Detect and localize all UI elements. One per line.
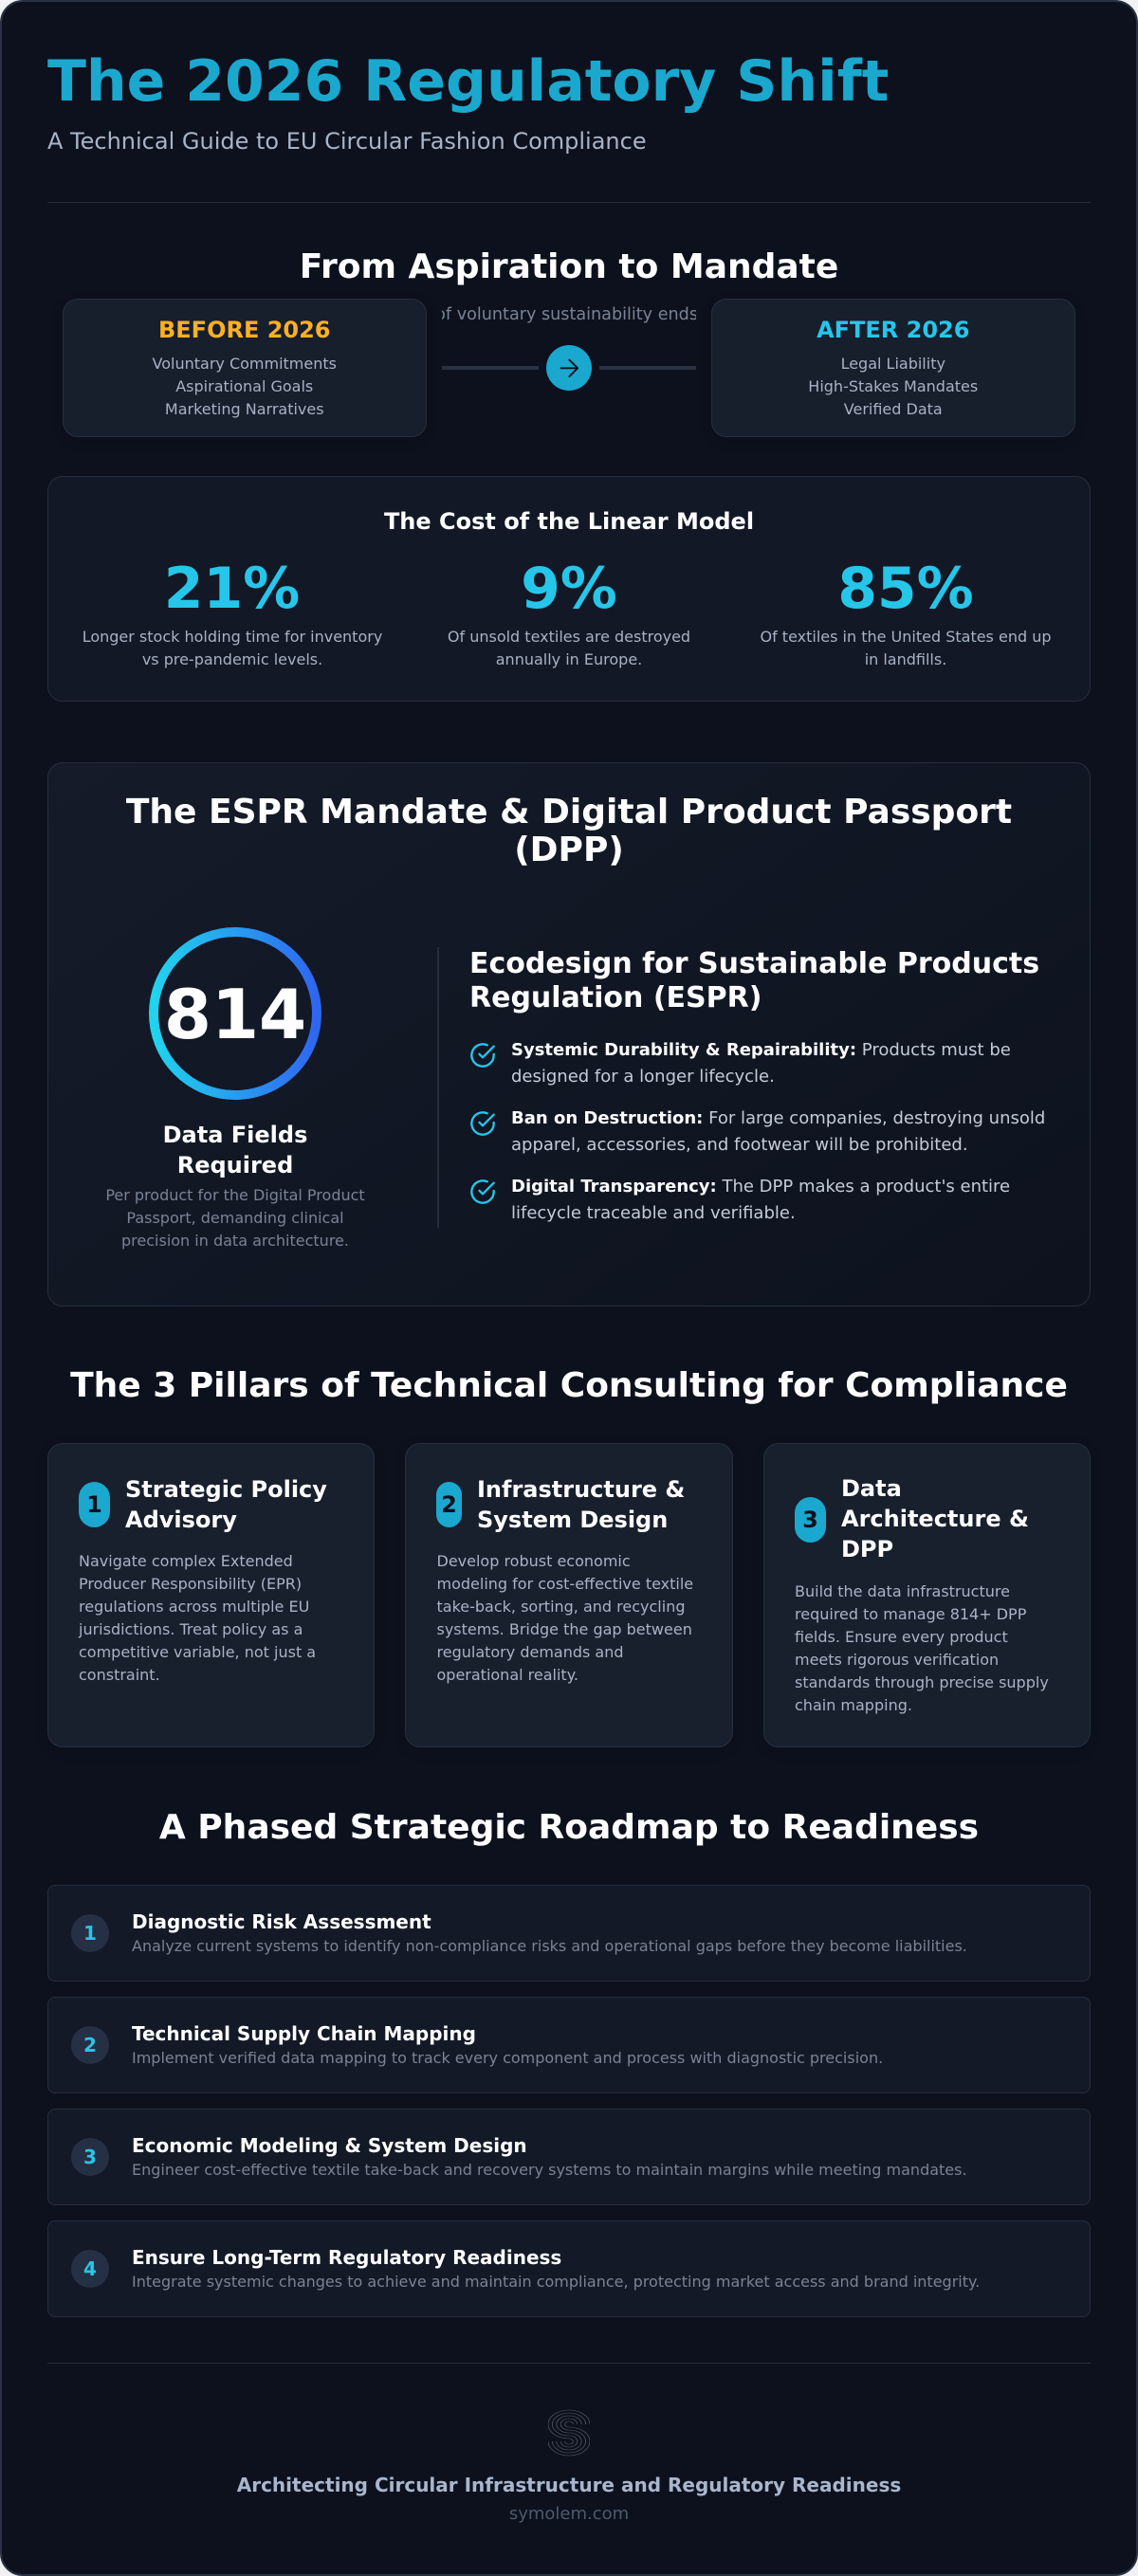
ring gauge: 814 [149, 927, 321, 1100]
pillar 1 heading: Advisory [125, 1507, 237, 1533]
heading: ecodesign regulation [469, 947, 1039, 1014]
bullet: digital transparency: lifecycle traceable and verifiable. [511, 1203, 796, 1223]
data fields note [105, 1185, 365, 1250]
arrow connector [442, 345, 696, 391]
pillar 3 heading: DPP [841, 1536, 893, 1562]
roadmap step 2 [47, 1997, 1091, 2093]
stat: 85%: Of textiles in the United States end up [760, 628, 1051, 645]
footer website: symolem.com [509, 2504, 629, 2524]
pillar 3 body: meets rigorous verification [795, 1650, 999, 1669]
roadmap step 4 [47, 2220, 1091, 2317]
big number 814: 814 [164, 975, 306, 1054]
stat: 85% [760, 556, 1051, 667]
bullet: durability: Systemic Durability & Repairability: Products must be [511, 1040, 1011, 1060]
pillar 1 body: competitive variable, not just a [79, 1642, 316, 1661]
pillar 2 body: regulatory demands and [436, 1642, 624, 1661]
panel: after 2026 [711, 299, 1075, 437]
pillar 2 heading [477, 1476, 685, 1533]
panel: cost of the linear model [47, 476, 1091, 702]
pillar 3 heading: Data [841, 1475, 902, 1502]
heading: ecodesign regulation: Ecodesign for Sustainable Products [469, 947, 1039, 980]
roadmap step 1 [47, 1885, 1091, 1982]
roadmap step 2: Implement verified data mapping to track every component and process with diagnostic precision. [132, 2048, 883, 2067]
pillar 3 heading [841, 1475, 1029, 1562]
roadmap step 3: Economic Modeling & System Design [132, 2134, 527, 2157]
heading: ESPR mandate and DPP [126, 793, 1012, 869]
pillar 3 body: fields. Ensure every product [795, 1627, 1008, 1646]
bullet: digital transparency [470, 1177, 1010, 1223]
pillar 2 badge [436, 1482, 462, 1527]
stat: 21% [83, 556, 382, 667]
pillar 1 body [78, 1551, 316, 1684]
clipped transition caption: voluntary sustainability ends [457, 305, 696, 324]
roadmap step 1: 1 [83, 1922, 97, 1945]
pillar 3 body: chain mapping. [795, 1695, 912, 1714]
pillar 3 body: Build the data infrastructure [795, 1581, 1010, 1600]
pillar 2 body: operational reality. [436, 1665, 578, 1684]
bullet: digital transparency: Digital Transparency: The DPP makes a product's entire [511, 1177, 1010, 1197]
stat: 21%: 21% [164, 556, 300, 622]
before list [152, 355, 337, 417]
after list: Legal Liability [841, 355, 945, 372]
pillar 2 body: systems. Bridge the gap between [436, 1619, 692, 1638]
data fields label: Required [177, 1152, 293, 1178]
pillar 1 badge [79, 1482, 110, 1527]
stat: 21%: Longer stock holding time for inventory [83, 628, 382, 645]
data fields note: precision in data architecture. [121, 1231, 349, 1250]
roadmap step 3: 3 [83, 2146, 97, 2168]
roadmap step 4: Ensure Long-Term Regulatory Readiness [132, 2246, 561, 2269]
pillar 2 heading: System Design [477, 1507, 668, 1533]
stat: 21%: vs pre-pandemic levels. [142, 650, 322, 667]
roadmap step 3: Engineer cost-effective textile take-back and recovery systems to maintain margins while meeting mandates. [132, 2160, 967, 2179]
bullet: ban on destruction: apparel, accessories, and footwear will be prohibited. [511, 1135, 968, 1155]
bullet: ban on destruction [470, 1108, 1045, 1155]
footer tagline: Architecting Circular Infrastructure and Regulatory Readiness [237, 2474, 901, 2496]
stat: 85%: 85% [837, 556, 974, 622]
pillar 1 body: regulations across multiple EU [79, 1597, 309, 1616]
title: The 2026 Regulatory Shift [47, 48, 890, 115]
panel: before 2026 [63, 299, 427, 437]
pillar card 1 [47, 1443, 375, 1747]
pillar 2 body: modeling for cost-effective textile [436, 1574, 693, 1593]
bullet: ban on destruction: Ban on Destruction: For large companies, destroying unsold [511, 1108, 1045, 1128]
pillar 2 body: take-back, sorting, and recycling [436, 1597, 685, 1616]
stat: 85%: in landfills. [865, 650, 946, 667]
heading: cost of the linear model: The Cost of the Linear Model [384, 508, 754, 535]
after list: Verified Data [844, 400, 943, 417]
heading: ESPR mandate and DPP: (DPP) [514, 831, 624, 869]
before heading: BEFORE 2026 [158, 317, 330, 343]
panel: ESPR mandate [47, 762, 1091, 1306]
pillar 1 body: jurisdictions. Treat policy as a [79, 1619, 303, 1638]
pillar 3 heading: Architecture & [841, 1506, 1029, 1532]
before list: Voluntary Commitments [153, 355, 337, 372]
pillar 2 badge: 2 [441, 1491, 457, 1518]
before list: Aspirational Goals [175, 377, 313, 394]
pillar 3 body [795, 1581, 1049, 1714]
pillar 3 badge [795, 1497, 826, 1543]
roadmap step 4: Integrate systemic changes to achieve and maintain compliance, protecting market access and brand integrity. [132, 2272, 980, 2291]
pillar card 3 [763, 1443, 1091, 1747]
stat: 9% [448, 556, 690, 667]
pillar 1 heading [125, 1476, 327, 1533]
data fields note: Passport, demanding clinical [126, 1208, 344, 1227]
pillar 2 heading: Infrastructure & [477, 1476, 685, 1503]
roadmap step 1: Analyze current systems to identify non-compliance risks and operational gaps before they become liabilities. [132, 1936, 967, 1955]
heading: from aspiration to mandate: From Aspiration to Mandate [300, 247, 838, 286]
stat: 9%: Of unsold textiles are destroyed [448, 628, 690, 645]
subtitle: A Technical Guide to EU Circular Fashion Compliance [47, 128, 647, 155]
after list: High-Stakes Mandates [808, 377, 978, 394]
heading: ecodesign regulation: Regulation (ESPR) [469, 981, 762, 1014]
pillar 1 body: constraint. [79, 1665, 160, 1684]
data fields note: Per product for the Digital Product [105, 1185, 365, 1204]
roadmap step 4: 4 [83, 2257, 97, 2280]
pillar 3 body: required to manage 814+ DPP [795, 1604, 1026, 1623]
heading: three pillars: The 3 Pillars of Technical Consulting for Compliance [70, 1366, 1068, 1405]
data fields label: Data Fields [163, 1122, 307, 1148]
icon: arrow in circle [546, 345, 592, 391]
heading: roadmap: A Phased Strategic Roadmap to Readiness [159, 1808, 979, 1847]
roadmap step 3 [47, 2109, 1091, 2205]
heading: ESPR mandate and DPP: The ESPR Mandate & Digital Product Passport [126, 793, 1012, 831]
stat: 9%: 9% [521, 556, 617, 622]
pillar 3 badge: 3 [802, 1507, 818, 1533]
pillar 2 body: Develop robust economic [436, 1551, 631, 1570]
pillar 3 body: standards through precise supply [795, 1672, 1049, 1691]
roadmap step 1: Diagnostic Risk Assessment [132, 1910, 431, 1933]
pillar 1 badge: 1 [86, 1491, 102, 1518]
bullet: durability [470, 1040, 1011, 1087]
pillar 1 body: Navigate complex Extended [79, 1551, 293, 1570]
bullet: durability: designed for a longer lifecycle. [511, 1067, 775, 1087]
pillar card 2 [405, 1443, 732, 1747]
roadmap step 2: 2 [83, 2034, 97, 2056]
before list: Marketing Narratives [165, 400, 324, 417]
stat: 9%: annually in Europe. [496, 650, 642, 667]
icon: symolem logo [548, 2410, 590, 2456]
roadmap step 2: Technical Supply Chain Mapping [132, 2022, 476, 2045]
data fields label [163, 1122, 307, 1178]
after heading: AFTER 2026 [817, 317, 969, 343]
pillar 1 heading: Strategic Policy [125, 1476, 327, 1503]
pillar 1 body: Producer Responsibility (EPR) [79, 1574, 302, 1593]
after list [808, 355, 978, 417]
pillar 2 body [436, 1551, 693, 1684]
